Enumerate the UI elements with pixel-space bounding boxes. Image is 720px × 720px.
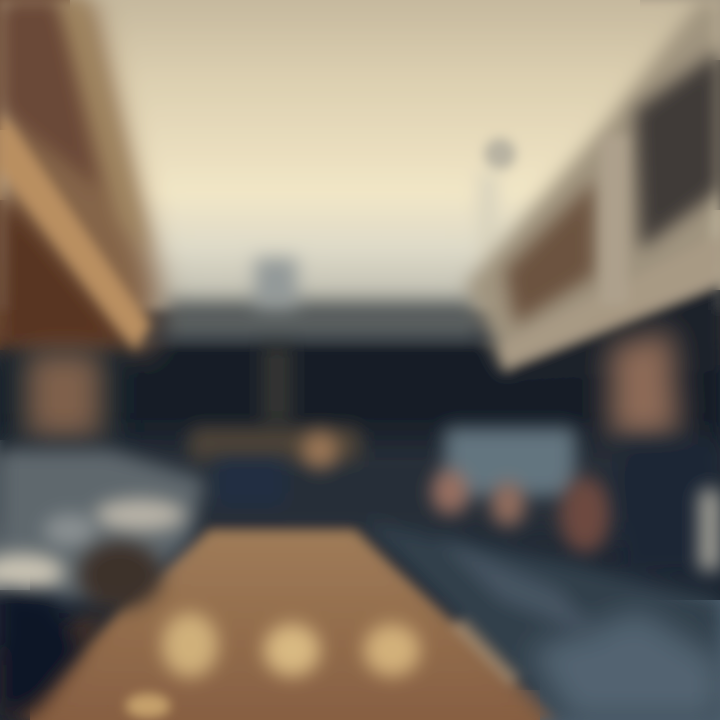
left foreground seating (0, 450, 205, 720)
lamp post (478, 138, 516, 262)
floor: wooden court (0, 530, 560, 720)
sky (0, 0, 720, 310)
left building (0, 0, 160, 460)
distant dark building (0, 258, 720, 455)
floor: blue-grey seating (360, 520, 720, 720)
courtyard crowd band (0, 428, 720, 575)
right building (465, 0, 720, 445)
